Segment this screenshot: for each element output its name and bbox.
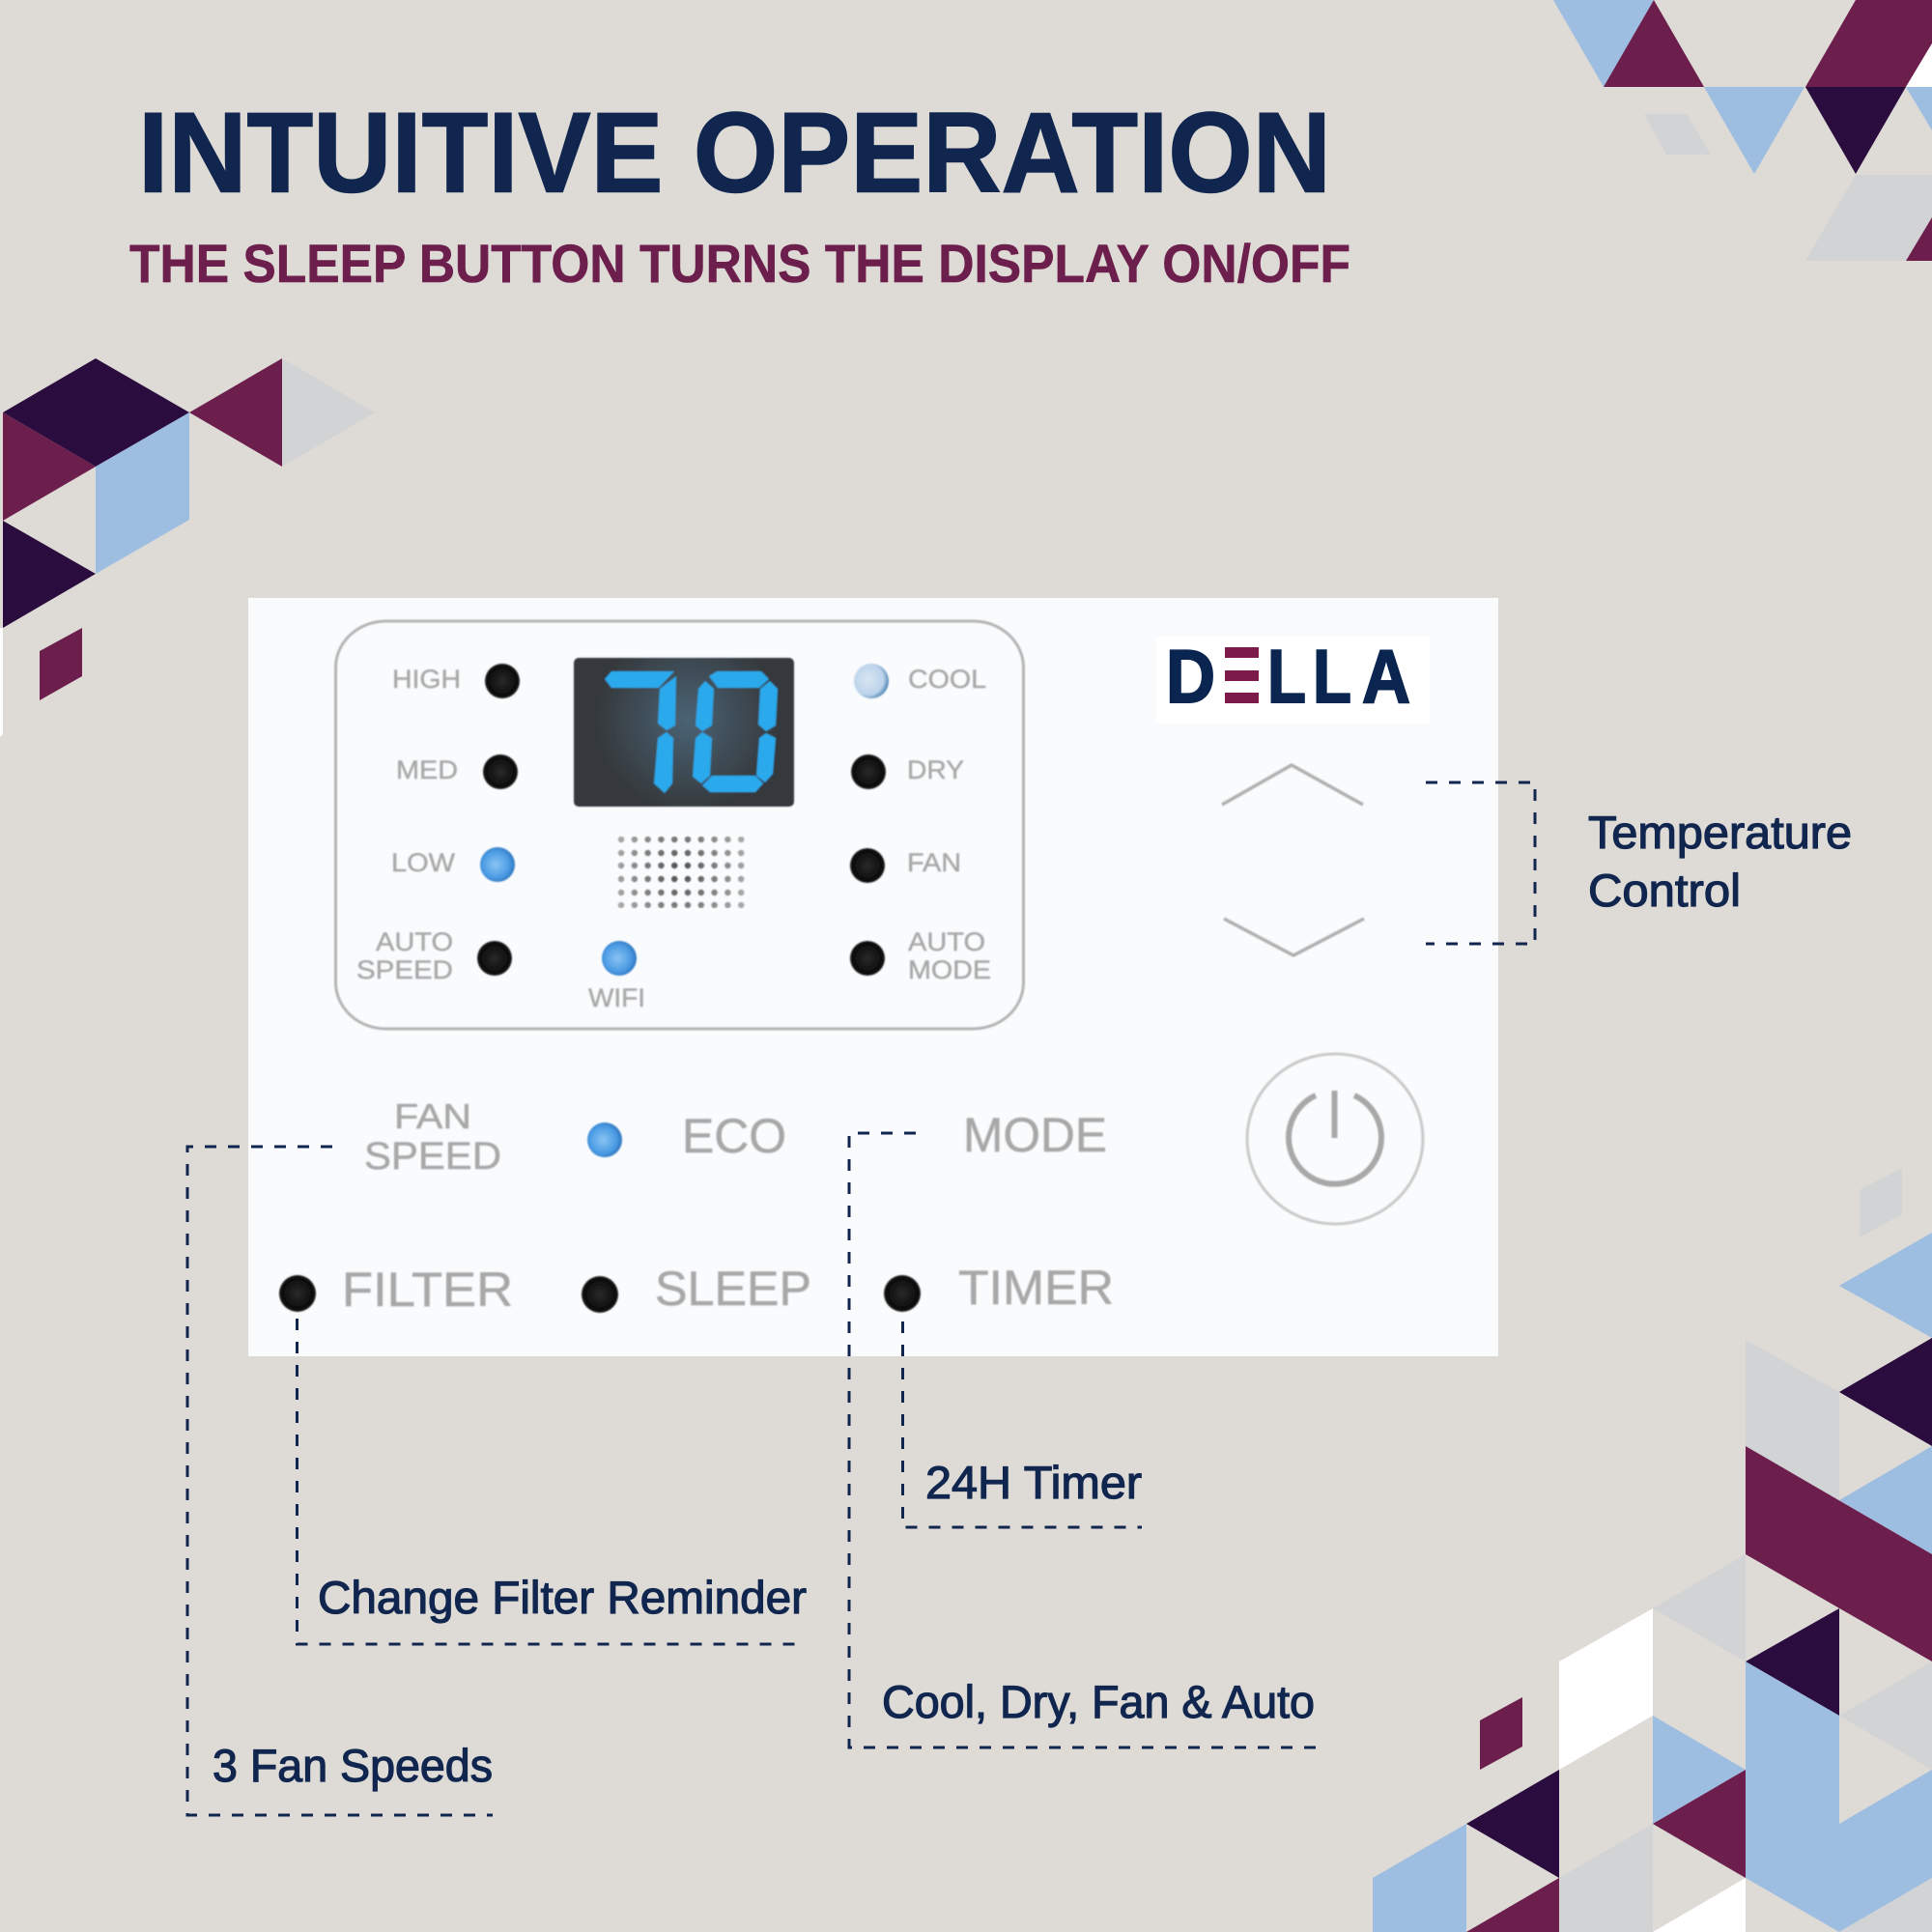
display labels: AUTO (376, 927, 453, 956)
label: modes: Cool, Dry, Fan & Auto (882, 1676, 1315, 1727)
display labels: MED (396, 755, 458, 784)
button labels: FAN (394, 1096, 471, 1136)
decoration: left cluster (0, 358, 375, 737)
logo: DELLA: L (1267, 634, 1306, 719)
leader line: temperature control (1426, 782, 1535, 944)
leader line: fan speeds (187, 1147, 493, 1815)
button labels: FILTER (342, 1263, 513, 1317)
logo: DELLA: A (1362, 634, 1410, 719)
label: temperature control (1588, 807, 1852, 916)
leader line: timer (902, 1321, 1142, 1527)
digits 70 (605, 671, 778, 793)
display labels: DRY (907, 755, 964, 784)
label: temperature control: Temperature (1588, 807, 1852, 858)
button labels: SLEEP (655, 1262, 811, 1316)
display labels: HIGH (392, 665, 461, 694)
button labels: MODE (963, 1108, 1107, 1162)
button labels: SPEED (364, 1135, 501, 1178)
icon: temperature up chevron (1222, 765, 1363, 805)
subtitle: THE SLEEP BUTTON TURNS THE DISPLAY ON/OFF (129, 233, 1350, 294)
display labels: WIFI (588, 983, 645, 1012)
speaker grille (621, 839, 744, 905)
button labels: TIMER (958, 1261, 1114, 1315)
label: fan speeds: 3 Fan Speeds (213, 1740, 493, 1791)
label: temperature control: Control (1588, 865, 1741, 916)
logo: DELLA: L (1313, 634, 1351, 719)
leader line: filter reminder (298, 1319, 795, 1644)
display labels: MODE (908, 955, 991, 984)
display labels: SPEED (356, 955, 453, 984)
display group outline (336, 621, 1024, 1029)
icon: temperature down chevron (1224, 919, 1364, 955)
decoration: top right triangles (1553, 0, 1932, 261)
label: filter reminder: Change Filter Reminder (318, 1572, 807, 1623)
logo: DELLA: D (1166, 634, 1215, 719)
display labels (356, 665, 991, 1012)
display labels: FAN (907, 848, 961, 877)
indicator dots (279, 664, 921, 1313)
logo: DELLA (1156, 634, 1430, 724)
title: INTUITIVE OPERATION (138, 89, 1331, 216)
display labels: LOW (391, 848, 456, 877)
label: timer: 24H Timer (925, 1457, 1142, 1508)
button labels (342, 1096, 1114, 1317)
display labels: AUTO (908, 927, 985, 956)
panel: control panel (248, 598, 1498, 1356)
LED display (574, 658, 794, 807)
icon: power button (1247, 1054, 1423, 1224)
display labels: COOL (908, 665, 986, 694)
decoration: bottom right cluster (1373, 1168, 1932, 1932)
button labels: ECO (682, 1109, 786, 1163)
leader line: mode (849, 1133, 1317, 1747)
